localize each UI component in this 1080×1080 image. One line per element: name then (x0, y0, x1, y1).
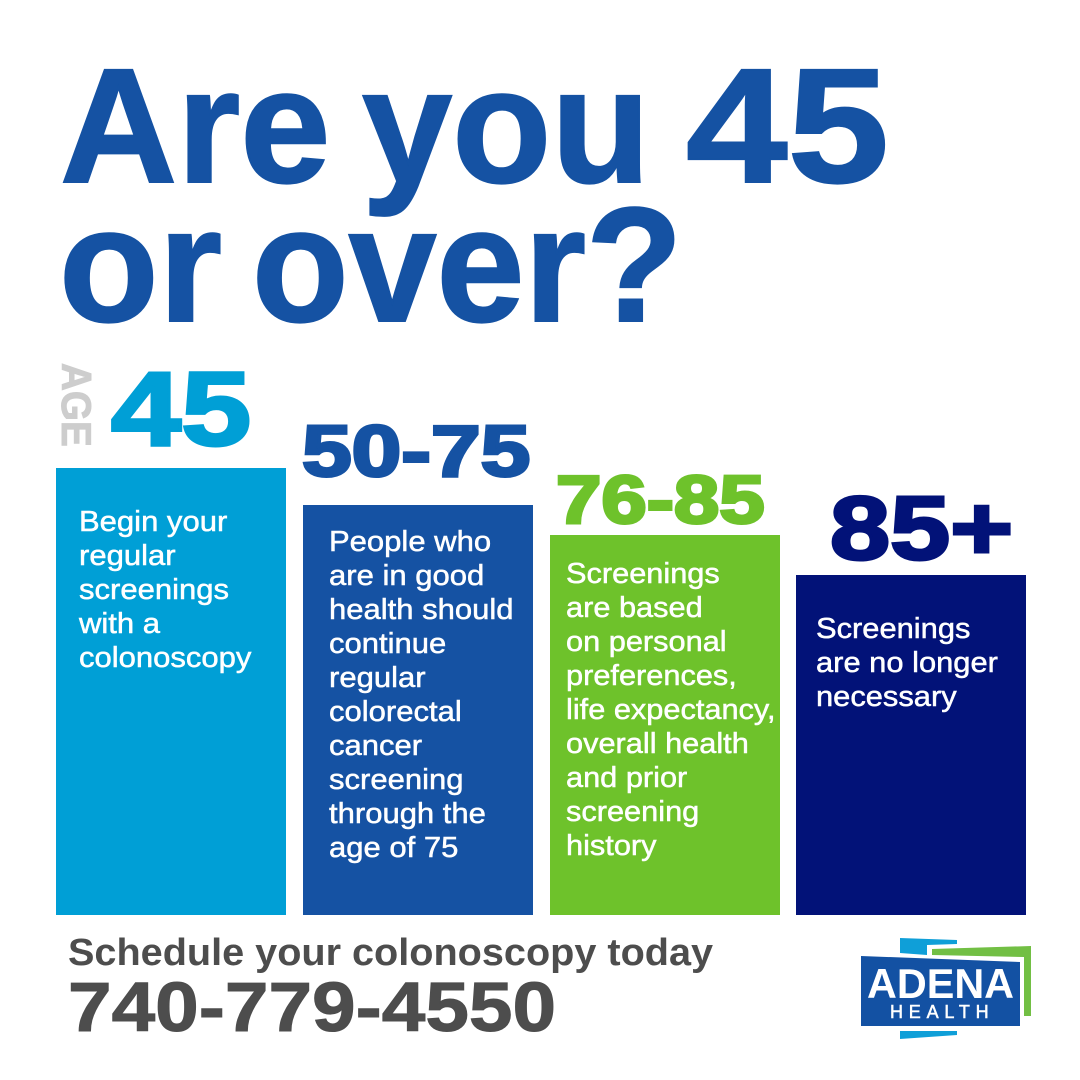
text: age 50-75: regular (329, 662, 426, 694)
number: 76-85: 76-85 (556, 461, 765, 537)
text: age 76-85: screening (566, 796, 699, 828)
bar: age 76-85 (550, 535, 780, 915)
title: or (59, 173, 222, 356)
text: age 85+: necessary (816, 681, 957, 713)
bar: age 45 (56, 468, 286, 915)
text: age 50-75: screening (329, 764, 463, 796)
panel: age 85+ (796, 478, 1026, 915)
text: age 50-75: through the (329, 798, 486, 830)
panel: age 76-85 (550, 461, 784, 915)
text: age 76-85: are based (566, 592, 703, 624)
text: age 76-85: history (566, 830, 657, 862)
text: age 76-85: overall health (566, 728, 749, 760)
number: 50-75: 50-75 (302, 412, 530, 492)
text: age 50-75: colorectal (329, 696, 462, 728)
text: age 76-85: preferences, (566, 660, 737, 692)
text: age 50-75: continue (329, 628, 446, 660)
call to action: 740-779-4550 (68, 968, 556, 1046)
title (59, 34, 889, 357)
text: age 76-85: Screenings (566, 558, 720, 590)
text: age 76-85: on personal (566, 626, 727, 658)
call to action (68, 932, 713, 1046)
title: 45 (686, 34, 889, 217)
number: 45: 45 (111, 350, 251, 468)
text: age 85+: Screenings (816, 613, 970, 645)
text: age 50-75: health should (329, 594, 514, 626)
bar: age 50-75 (303, 505, 533, 915)
logo: Adena Health: ADENA (867, 960, 1014, 1007)
text: age 50-75: People who (329, 526, 491, 558)
text: age 45: Begin your (79, 506, 227, 538)
text: age 45: regular (79, 540, 176, 572)
title: over? (252, 175, 683, 357)
panel: age 45 (56, 350, 286, 915)
text: age 76-85: and prior (566, 762, 687, 794)
text: age 45: colonoscopy (79, 642, 251, 674)
bar: age 85+ (796, 575, 1026, 915)
title: you (362, 36, 650, 217)
text: age 50-75: cancer (329, 730, 422, 762)
number: 85+: 85+ (830, 478, 1013, 579)
call to action: Schedule your colonoscopy today (68, 932, 713, 974)
text: age 76-85: life expectancy, (566, 694, 776, 726)
text: age 45: screenings (79, 574, 229, 606)
text: age 50-75: are in good (329, 560, 484, 592)
logo: Adena Health (861, 938, 1031, 1039)
logo: Adena Health: HEALTH (890, 1002, 994, 1022)
text: age 45: with a (78, 608, 160, 640)
text: age 50-75: age of 75 (329, 832, 458, 864)
label: age: AGE (53, 363, 101, 447)
title: Are (60, 36, 330, 217)
text: age 85+: are no longer (816, 647, 998, 679)
panel: age 50-75 (302, 412, 533, 915)
